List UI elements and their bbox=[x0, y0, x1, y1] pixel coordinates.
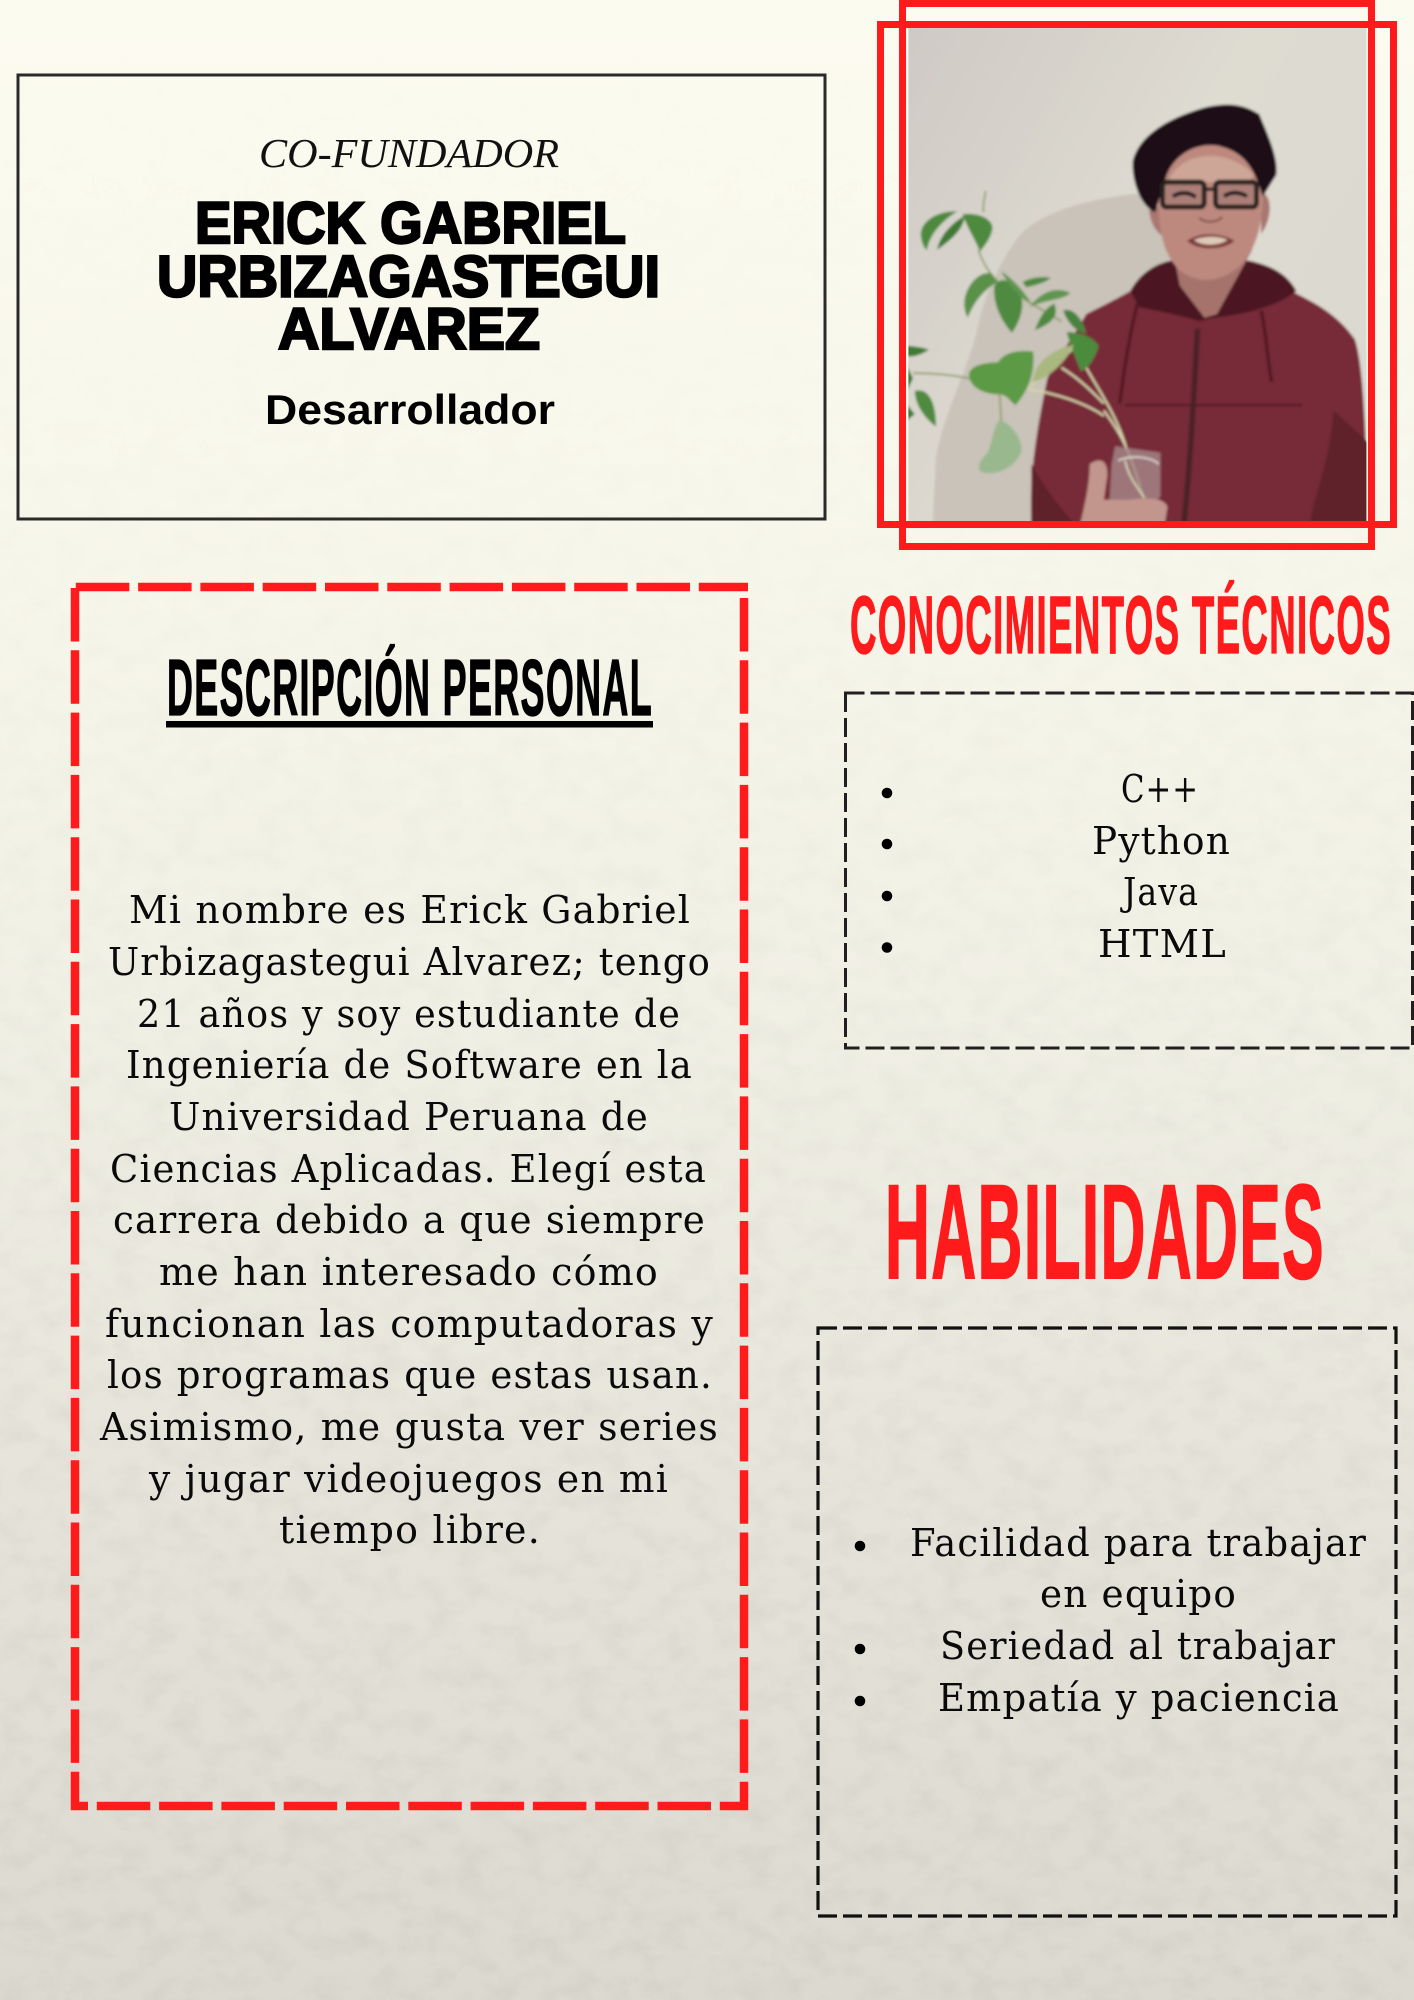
dashed red border bbox=[71, 587, 748, 1810]
list items: HTML bbox=[1098, 922, 1227, 966]
glasses bbox=[1163, 182, 1257, 207]
description paragraph: me han interesado cómo bbox=[159, 1250, 659, 1294]
description paragraph: tiempo libre. bbox=[279, 1508, 541, 1552]
description paragraph: Universidad Peruana de bbox=[169, 1095, 649, 1139]
panel: name card bbox=[18, 75, 825, 519]
list items: C++ bbox=[1121, 767, 1199, 811]
background: textured paper bbox=[0, 936, 1414, 2000]
description paragraph: 21 años y soy estudiante de bbox=[137, 992, 681, 1036]
mouth bbox=[1187, 234, 1235, 248]
jar bbox=[1108, 444, 1162, 501]
panel: technical skills list bbox=[846, 693, 1412, 1048]
hoodie bbox=[1031, 286, 1369, 528]
name heading: URBIZAGASTEGUI bbox=[157, 244, 660, 310]
description paragraph bbox=[99, 888, 719, 1552]
hair bbox=[1133, 105, 1277, 212]
name heading: ERICK GABRIEL bbox=[195, 191, 626, 256]
description paragraph: carrera debido a que siempre bbox=[113, 1198, 706, 1242]
shadow on wall bbox=[932, 191, 1178, 528]
description paragraph: Urbizagastegui Alvarez; tengo bbox=[108, 940, 711, 984]
photo: portrait with plant bbox=[902, 21, 1372, 528]
list items: Java bbox=[1119, 870, 1199, 914]
list items: en equipo bbox=[1040, 1572, 1237, 1616]
name heading bbox=[157, 191, 660, 362]
plant stems bbox=[913, 191, 1061, 421]
nose bbox=[1199, 217, 1222, 222]
heading: descripcion personal bbox=[166, 643, 653, 732]
job title: Desarrollador bbox=[265, 386, 555, 433]
neck and face bbox=[1173, 250, 1252, 318]
description paragraph: Ingeniería de Software en la bbox=[126, 1043, 693, 1087]
description paragraph: Ciencias Aplicadas. Elegí esta bbox=[110, 1147, 707, 1191]
description paragraph: los programas que estas usan. bbox=[107, 1353, 713, 1397]
list items: Seriedad al trabajar bbox=[940, 1624, 1336, 1668]
panel: personal description bbox=[71, 587, 748, 1810]
list items bbox=[910, 1521, 1367, 1720]
hand bbox=[1079, 461, 1167, 528]
panel: skills list bbox=[818, 1328, 1396, 1916]
hood lining bbox=[1130, 261, 1296, 321]
list bullets bbox=[855, 1541, 865, 1706]
list bullets bbox=[882, 788, 892, 953]
description paragraph: Asimismo, me gusta ver series bbox=[99, 1405, 719, 1449]
description paragraph: y jugar videojuegos en mi bbox=[148, 1457, 669, 1501]
list items: Python bbox=[1092, 819, 1231, 863]
description paragraph: Mi nombre es Erick Gabriel bbox=[129, 888, 691, 932]
description paragraph: funcionan las computadoras y bbox=[105, 1302, 714, 1346]
panel: personal description: DESCRIPCIÓN PERSONAL bbox=[167, 643, 653, 732]
list items bbox=[1092, 767, 1231, 966]
photo frames bbox=[880, 4, 1394, 546]
list items: Empatía y paciencia bbox=[938, 1676, 1340, 1720]
name heading: ALVAREZ bbox=[278, 297, 540, 362]
list items: Facilidad para trabajar bbox=[910, 1521, 1367, 1565]
leaves bbox=[921, 211, 957, 250]
role label: CO-FUNDADOR bbox=[259, 130, 559, 176]
